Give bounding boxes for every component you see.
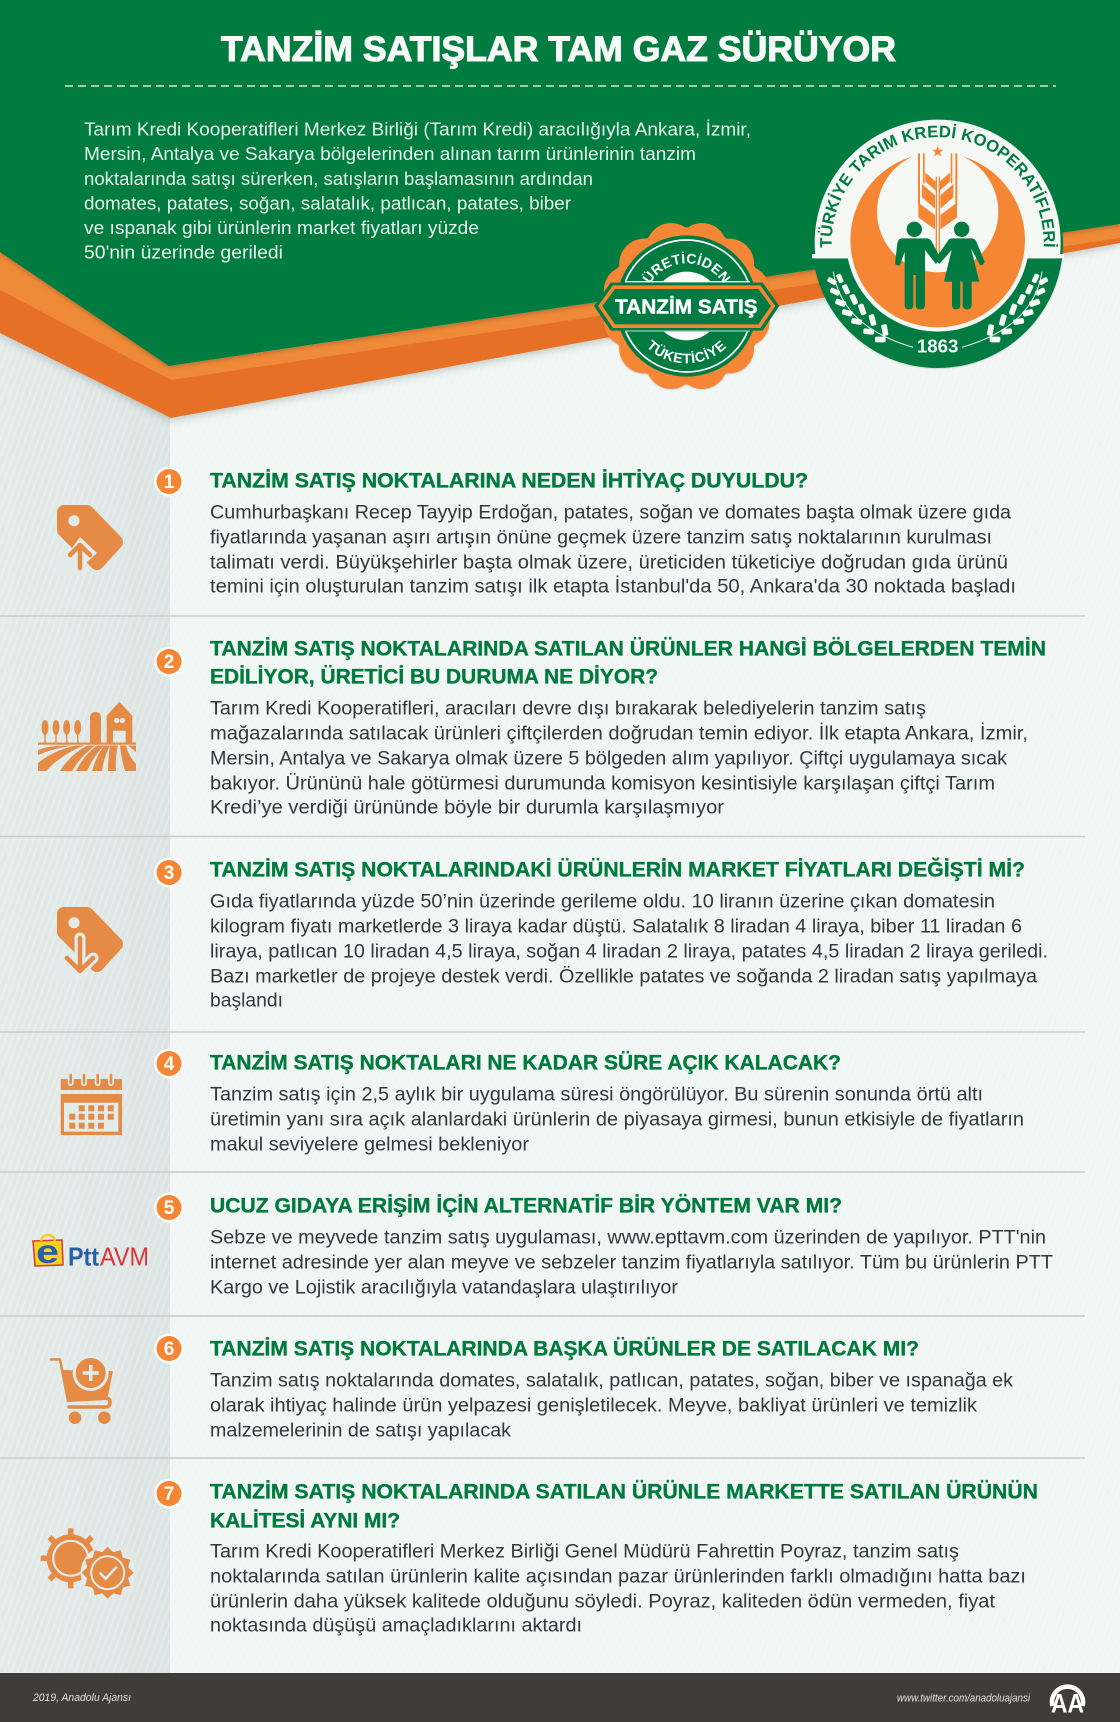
panel: question 1 [56, 466, 1016, 597]
number badge 2 [154, 646, 184, 676]
body 1 [210, 502, 1016, 597]
body 7 [210, 1541, 1026, 1636]
figures: man and woman [895, 222, 985, 309]
number badge 5 [154, 1192, 184, 1222]
number badge 7 [154, 1478, 184, 1508]
body 2: Mersin, Antalya ve Sakarya olmak üzere 5 bölgeden alım yapılıyor. Çiftçi uygulamaya sıcak [210, 748, 1008, 769]
body 1: Cumhurbaşkanı Recep Tayyip Erdoğan, patates, soğan ve domates başta olmak üzere gıda [210, 502, 1011, 523]
heading 7 [210, 1480, 1038, 1532]
logo: Türkiye Tarım Kredi Kooperatifleri [812, 120, 1064, 370]
body 2 [210, 698, 1028, 818]
logo ring text: TÜRKİYE TARIM KREDİ KOOPERATİFLERİ [818, 124, 1058, 248]
body 3: başlandı [210, 990, 283, 1011]
body 3 [210, 891, 1048, 1011]
number badge 3: 3 [164, 863, 174, 884]
body 7: noktasında düşüşü amaçladıklarını aktardı [210, 1615, 582, 1636]
footer credit: 2019, Anadolu Ajansı [32, 1692, 131, 1704]
panel: question 6 [51, 1334, 1014, 1441]
body 2: mağazalarında satılacak ürünleri çiftçilerden doğrudan temin ediyor. İlk etapta Ankara, İzmir, [210, 723, 1028, 744]
intro text: Tarım Kredi Kooperatifleri Merkez Birliği (Tarım Kredi) aracılığıyla Ankara, İzmir, [84, 120, 751, 140]
number badge 5: 5 [164, 1198, 175, 1219]
body 3: liraya, patlıcan 10 liradan 4,5 liraya, soğan 4 liradan 2 liraya, patates 4,5 liradan 2 liraya geriledi. [210, 941, 1048, 962]
body 3: kilogram fiyatı marketlerde 3 liraya kadar düştü. Salatalık 8 liradan 4 liraya, biber 11 liradan 6 [210, 916, 1022, 937]
panel: question 2 [38, 637, 1046, 818]
body 4: Tanzim satış için 2,5 aylık bir uygulama süresi öngörülüyor. Bu sürenin sonunda örtü altı [210, 1084, 983, 1105]
wheat emblem [918, 153, 957, 253]
heading 7: KALİTESİ AYNI MI? [210, 1509, 400, 1532]
body 5: internet adresinde yer alan meyve ve sebzeler tanzim fiyatlarıyla satılıyor. Tüm bu ürünlerin PTT [210, 1252, 1053, 1273]
body 4: makul seviyelere gelmesi bekleniyor [210, 1134, 530, 1155]
heading 1: TANZİM SATIŞ NOKTALARINA NEDEN İHTİYAÇ DUYULDU? [210, 469, 808, 492]
number badge 4 [154, 1048, 184, 1078]
heading 7: TANZİM SATIŞ NOKTALARINDA SATILAN ÜRÜNLE MARKETTE SATILAN ÜRÜNÜN [210, 1480, 1038, 1503]
heading 3: TANZİM SATIŞ NOKTALARINDAKİ ÜRÜNLERİN MARKET FİYATLARI DEĞİŞTİ Mİ? [210, 857, 1025, 881]
number badge 2: 2 [164, 652, 174, 673]
number badge 7: 7 [164, 1484, 174, 1505]
body 6: malzemelerinin de satışı yapılacak [210, 1420, 512, 1441]
title: TANZİM SATIŞLAR TAM GAZ SÜRÜYOR [221, 30, 896, 69]
body 1: talimatı verdi. Büyükşehirler başta olmak üzere, üreticiden tüketiciye doğrudan gıda ürünü [210, 552, 1008, 573]
header chevron band [0, 0, 1120, 418]
number badge 6 [154, 1334, 184, 1364]
body 3: Bazı marketler de projeye destek verdi. Özellikle patates ve soğanda 2 liradan satış yapılmaya [210, 966, 1037, 987]
body 2: Tarım Kredi Kooperatifleri, aracıları devre dışı bırakarak belediyelerin tanzim satış [210, 698, 926, 719]
body 7: noktalarında satılan ürünlerin kalite açısından pazar ürünlerinden farklı olmadığını hatta bazı [210, 1566, 1026, 1587]
badge label: TANZİM SATIŞ [615, 295, 758, 318]
icon: price tag down [56, 914, 116, 980]
intro text [84, 120, 751, 262]
body 2: Kredi’ye verdiği ürününde böyle bir durumla karşılaşmıyor [210, 797, 725, 818]
panel: question 4 [61, 1048, 1024, 1155]
icon: ePttAVM logo: Ptt [68, 1242, 99, 1272]
body 5: Kargo ve Lojistik aracılığıyla vatandaşlara ulaştırılıyor [210, 1277, 679, 1298]
number badge 1 [154, 466, 184, 496]
body 1: temini için oluşturulan tanzim satışı ilk etapta İstanbul'da 50, Ankara'da 30 noktada başladı [210, 576, 1016, 597]
body 2: bakıyor. Ürününü hale götürmesi durumunda komisyon kesintisiyle karşılaşan çiftçi Tarım [210, 773, 995, 794]
heading 2 [210, 637, 1046, 688]
body 1: fiyatlarında yaşanan aşırı artışın önüne geçmek üzere tanzim satış noktalarının kurulması [210, 527, 992, 548]
icon: price tag up [56, 512, 116, 576]
heading 2: TANZİM SATIŞ NOKTALARINDA SATILAN ÜRÜNLER HANGİ BÖLGELERDEN TEMİN [210, 637, 1046, 660]
row dividers [0, 616, 1085, 1458]
footer url: www.twitter.com/anadoluajansi [897, 1692, 1030, 1704]
badge top text: ÜRETİCİDEN [642, 252, 730, 283]
heading 4: TANZİM SATIŞ NOKTALARI NE KADAR SÜRE AÇIK KALACAK? [210, 1051, 841, 1074]
panel: question 3 [56, 857, 1048, 1011]
icon: gears with check [41, 1528, 135, 1600]
icon: farm [38, 702, 136, 771]
body 7: Tarım Kredi Kooperatifleri Merkez Birliği Genel Müdürü Fahrettin Poyraz, tanzim satış [210, 1541, 959, 1562]
icon: ePttAVM logo [33, 1233, 149, 1272]
logo year: 1863 [917, 335, 958, 356]
body 6: olarak ihtiyaç halinde ürün yelpazesi genişletilecek. Meyve, bakliyat ürünleri ve temizlik [210, 1395, 978, 1416]
body 4 [210, 1084, 1024, 1155]
heading 6: TANZİM SATIŞ NOKTALARINDA BAŞKA ÜRÜNLER DE SATILACAK MI? [210, 1337, 919, 1360]
intro text: ve ıspanak gibi ürünlerin market fiyatları yüzde [84, 218, 479, 238]
body 5: Sebze ve meyvede tanzim satış uygulaması, www.epttavm.com üzerinden de yapılıyor. PTT'nin [210, 1227, 1046, 1248]
panel: question 7 [41, 1478, 1038, 1636]
icon: AA logo: AA [1051, 1688, 1084, 1718]
wheat branch left [827, 272, 913, 347]
number badge 3 [154, 858, 184, 888]
icon: shopping cart plus [51, 1355, 113, 1424]
body 6 [210, 1370, 1014, 1441]
icon: calendar [61, 1075, 122, 1135]
heading 2: EDİLİYOR, ÜRETİCİ BU DURUMA NE DİYOR? [210, 665, 658, 688]
body 3: Gıda fiyatlarında yüzde 50’nin üzerinde gerileme oldu. 10 liranın üzerine çıkan domatesin [210, 891, 995, 912]
number badge 4: 4 [164, 1054, 175, 1075]
intro text: 50'nin üzerinde geriledi [84, 242, 283, 262]
heading 5: UCUZ GIDAYA ERİŞİM İÇİN ALTERNATİF BİR YÖNTEM VAR MI? [210, 1194, 842, 1217]
number badge 6: 6 [164, 1339, 174, 1360]
number badge 1: 1 [164, 472, 175, 493]
body 5 [210, 1227, 1053, 1298]
badge bottom text: TÜKETİCİYE [648, 340, 726, 364]
intro text: noktalarında satışı sürerken, satışların başlamasının ardından [84, 169, 593, 189]
star [932, 146, 943, 157]
body 4: üretimin yanı sıra açık alanlardaki ürünlerin de piyasaya girmesi, bunun etkisiyle de fiyatların [210, 1109, 1024, 1130]
panel: question 5 [33, 1192, 1053, 1298]
icon: ePttAVM logo: e [36, 1233, 59, 1270]
badge: tanzim satış [594, 223, 780, 390]
body 7: ürünlerin daha yüksek kalitede olduğunu söyledi. Poyraz, kaliteden ödün vermeden, fiyat [210, 1591, 996, 1612]
body 6: Tanzim satış noktalarında domates, salatalık, patlıcan, patates, soğan, biber ve ıspanağa ek [210, 1370, 1014, 1391]
footer [0, 1673, 1120, 1722]
wheat branch right [962, 272, 1049, 347]
intro text: Mersin, Antalya ve Sakarya bölgelerinden alınan tarım ürünlerinin tanzim [84, 144, 696, 164]
icon: ePttAVM logo: AVM [100, 1242, 149, 1272]
intro text: domates, patates, soğan, salatalık, patlıcan, patates, biber [84, 194, 571, 214]
